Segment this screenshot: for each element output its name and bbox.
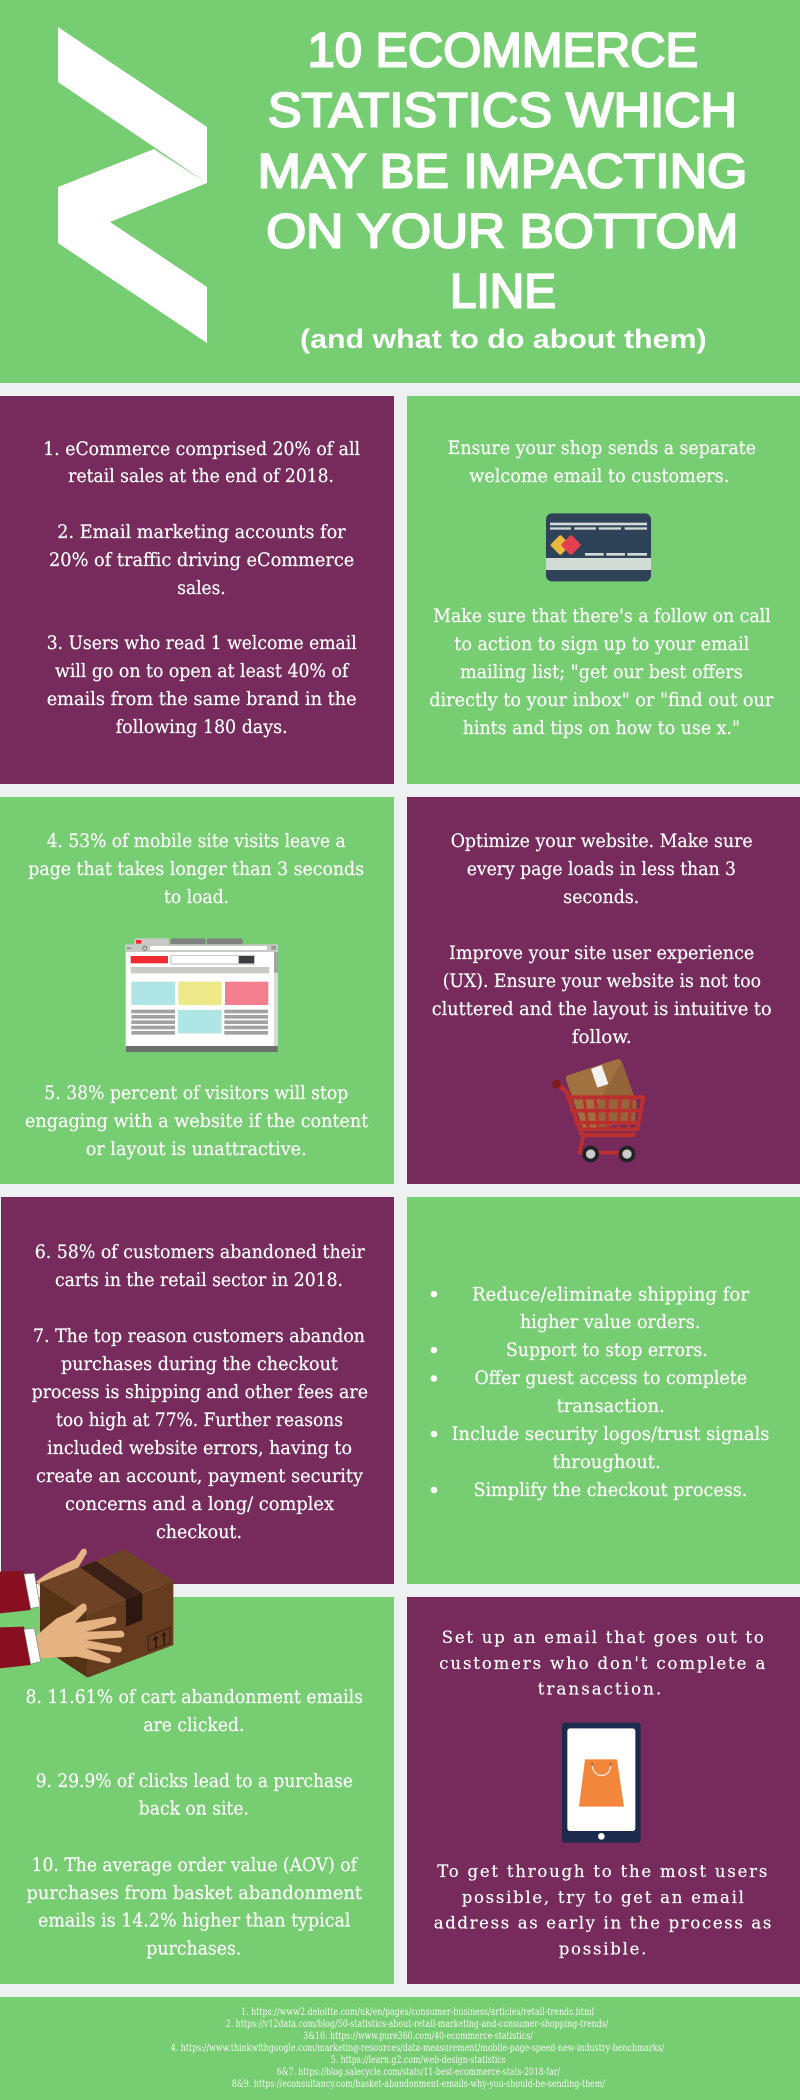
text: set up email <box>439 1628 765 1699</box>
text: statistic 7: concerns and a long/ complex <box>65 1493 334 1515</box>
text: statistic 2: sales. <box>177 577 226 599</box>
text: statistic 7 <box>32 1325 368 1543</box>
title: MAY BE IMPACTING <box>258 146 747 199</box>
text: improve user experience <box>432 942 772 1048</box>
icon: hands holding parcel <box>0 1549 173 1678</box>
text: follow-on call to action: to action to sign up to your email <box>454 633 749 655</box>
title: ON YOUR BOTTOM <box>266 206 738 259</box>
text: statistic 3: 3. Users who read 1 welcome email <box>47 632 357 654</box>
text: statistic 1: 1. eCommerce comprised 20% of all <box>43 438 360 460</box>
text: statistic 7: create an account, payment security <box>36 1465 363 1487</box>
panel: statistics 8 to 10 <box>0 1597 394 1984</box>
panel: statistics 1 to 3 <box>0 396 394 784</box>
text: statistic 7: included website errors, having to <box>47 1437 352 1459</box>
icon: credit card <box>546 513 651 581</box>
text: optimize website: every page loads in less than 3 <box>467 858 736 880</box>
text: optimize website <box>451 830 753 908</box>
text: capture email early: To get through to the most users <box>437 1862 767 1881</box>
text: statistic 2: 2. Email marketing accounts for <box>57 521 347 543</box>
text: statistic 6 <box>35 1241 366 1291</box>
text: statistic 9: 9. 29.9% of clicks lead to a purchase <box>36 1770 353 1792</box>
icon: tablet with shopping bag <box>562 1723 641 1843</box>
text: separate welcome email: Ensure your shop sends a separate <box>448 437 756 459</box>
bullet list: Simplify the checkout process. <box>474 1479 747 1501</box>
text: optimize website: Optimize your website. Make sure <box>451 830 753 852</box>
text: statistic 4: to load. <box>164 886 229 908</box>
footer: sources: 3&10. https://www.pure360.com/40-ecommerce-statistics/ <box>303 2030 533 2042</box>
text: statistic 4 <box>28 830 364 908</box>
text: statistic 8: 8. 11.61% of cart abandonment emails <box>26 1686 363 1708</box>
subtitle: (and what to do about them) <box>300 324 707 354</box>
text: statistic 6: carts in the retail sector in 2018. <box>55 1269 343 1291</box>
title: LINE <box>450 266 556 319</box>
text: statistic 5: or layout is unattractive. <box>86 1138 307 1160</box>
text: follow-on call to action: hints and tips on how to use x." <box>463 717 740 739</box>
bullet list: throughout. <box>553 1451 661 1473</box>
text: statistic 10: emails is 14.2% higher than typical <box>38 1910 350 1932</box>
text: statistic 4: 4. 53% of mobile site visits leave a <box>47 830 346 852</box>
footer: sources: 2. https://v12data.com/blog/50-statistics-about-retail-marketing-and-consumer-shopping-trends/ <box>226 2018 609 2030</box>
text: follow-on call to action <box>429 605 774 739</box>
text: statistic 6: 6. 58% of customers abandoned their <box>35 1241 366 1263</box>
text: capture email early: possible. <box>559 1940 646 1958</box>
text: statistic 1 <box>43 438 360 487</box>
text: set up email: customers who don't complete a <box>439 1654 765 1673</box>
text: separate welcome email: welcome email to customers. <box>469 465 729 487</box>
text: follow-on call to action: Make sure that there's a follow on call <box>433 605 771 627</box>
text: follow-on call to action: mailing list; "get our best offers <box>460 661 743 683</box>
bullet list <box>431 1284 769 1501</box>
footer: sources <box>0 1997 800 2100</box>
icon: browser window <box>125 938 278 1052</box>
text: set up email: Set up an email that goes out to <box>442 1628 764 1647</box>
text: statistic 1: retail sales at the end of 2018. <box>68 465 334 487</box>
text: statistic 3: emails from the same brand in the <box>47 688 357 710</box>
text: statistic 3 <box>47 632 357 738</box>
text: improve user experience: (UX). Ensure your website is not too <box>443 970 761 992</box>
icon: shopping cart with parcel <box>552 1059 643 1162</box>
text: statistic 10: purchases. <box>146 1938 241 1960</box>
text: improve user experience: cluttered and the layout is intuitive to <box>432 998 772 1020</box>
text: statistic 7: 7. The top reason customers abandon <box>33 1325 365 1347</box>
text: statistic 5: engaging with a website if the content <box>25 1110 369 1132</box>
text: statistic 3: following 180 days. <box>116 716 288 738</box>
panel: website optimisation advice <box>407 797 800 1184</box>
bullet list: Support to stop errors. <box>506 1339 708 1361</box>
bullet list: transaction. <box>557 1395 665 1417</box>
icon: chevron logo <box>58 27 207 343</box>
bullet list: Reduce/eliminate shipping for <box>472 1284 750 1306</box>
text: statistic 9: back on site. <box>139 1798 249 1820</box>
text: statistic 7: too high at 77%. Further reasons <box>56 1409 343 1431</box>
text: improve user experience: follow. <box>572 1026 632 1048</box>
text: statistic 10: 10. The average order value (AOV) of <box>32 1854 359 1876</box>
footer: sources: 6&7. https://blog.salecycle.com/stats/11-best-ecommerce-stats-2018-far/ <box>277 2066 560 2078</box>
text: capture email early <box>434 1862 771 1958</box>
text: optimize website: seconds. <box>563 886 639 908</box>
header panel <box>0 0 800 383</box>
bullet list: higher value orders. <box>520 1311 700 1333</box>
footer: sources: 8&9. https://econsultancy.com/basket-abandonment-emails-why-you-should-be-sending-them/ <box>232 2078 605 2090</box>
text: statistic 10 <box>26 1854 362 1960</box>
text: capture email early: possible, try to get an email <box>462 1888 744 1907</box>
text: statistic 5: 5. 38% percent of visitors will stop <box>44 1082 348 1104</box>
panel: checkout advice list <box>407 1197 800 1584</box>
text: statistic 5 <box>25 1082 369 1160</box>
panel: abandoned cart email advice <box>407 1597 800 1984</box>
text: statistic 3: will go on to open at least 40% of <box>55 660 350 682</box>
text: statistic 7: process is shipping and other fees are <box>32 1381 368 1403</box>
bullet list: Offer guest access to complete <box>474 1367 747 1389</box>
title: STATISTICS WHICH <box>268 85 737 138</box>
text: improve user experience: Improve your site user experience <box>449 942 754 964</box>
text: statistic 8: are clicked. <box>143 1714 244 1736</box>
footer: sources: 1. https://www2.deloitte.com/uk/en/pages/consumer-business/articles/retail-trends.html <box>241 2006 594 2018</box>
text: statistic 2 <box>49 521 354 599</box>
panel: welcome email advice <box>407 396 800 784</box>
panel: statistics 6 and 7 <box>1 1197 394 1584</box>
text: set up email: transaction. <box>538 1680 661 1699</box>
bullet list: Include security logos/trust signals <box>452 1423 769 1445</box>
text: separate welcome email <box>448 437 756 487</box>
text: statistic 7: purchases during the checkout <box>61 1353 338 1375</box>
title: 10 ECOMMERCE <box>308 25 698 78</box>
footer: sources: 5. https://learn.g2.com/web-design-statistics <box>331 2054 506 2066</box>
text: statistic 2: 20% of traffic driving eCommerce <box>49 549 354 571</box>
text: capture email early: address as early in the process as <box>434 1914 771 1933</box>
text: statistic 10: purchases from basket abandonment <box>26 1882 362 1904</box>
text: statistic 4: page that takes longer than 3 seconds <box>28 858 364 880</box>
panel: statistics 4 and 5 <box>0 797 394 1184</box>
text: follow-on call to action: directly to your inbox" or "find out our <box>429 689 774 711</box>
text: statistic 7: checkout. <box>156 1521 242 1543</box>
text: statistic 8 <box>26 1686 363 1736</box>
title <box>258 25 747 319</box>
text: statistic 9 <box>36 1770 353 1820</box>
